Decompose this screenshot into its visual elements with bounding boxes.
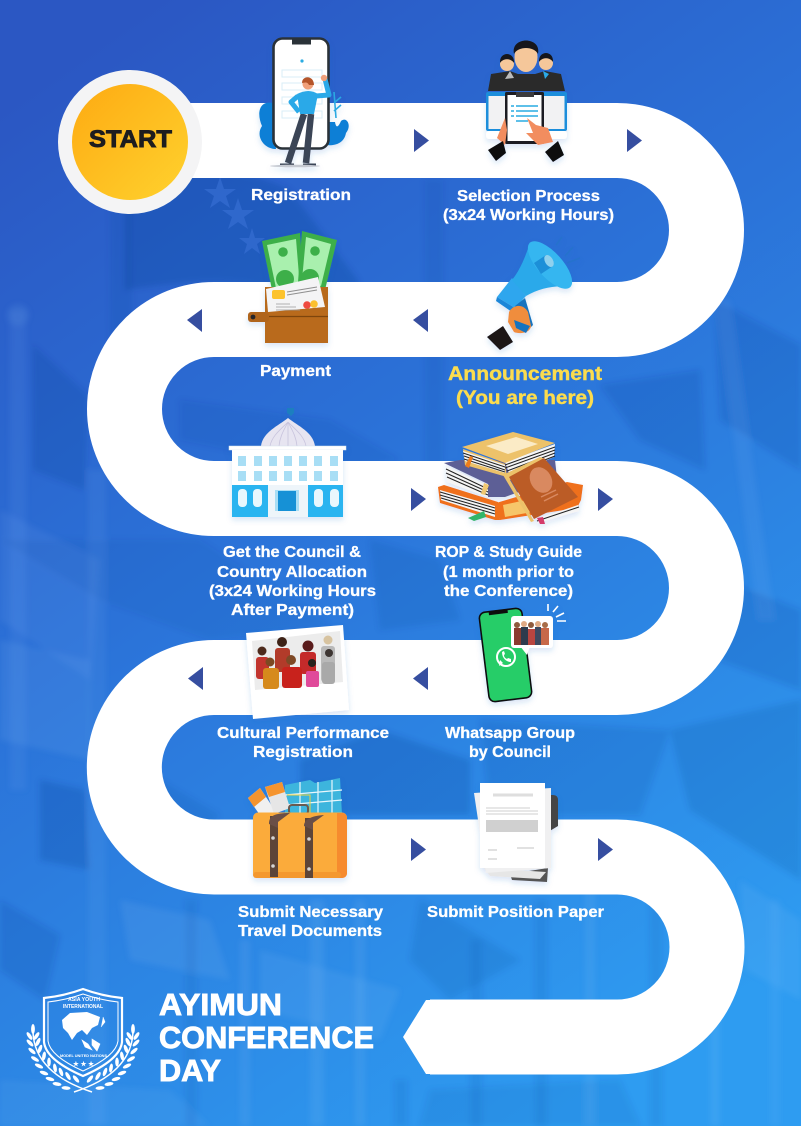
arrows along the road — [187, 129, 642, 861]
label: selection process: Selection Process — [457, 188, 600, 205]
label: get the council and country allocation: After Payment) — [231, 602, 354, 619]
label: whatsapp group by council — [445, 725, 575, 761]
label: registration: Registration — [251, 187, 351, 204]
icon: payment wallet — [248, 231, 337, 343]
heading: AYIMUN conference day: CONFERENCE — [159, 1020, 374, 1055]
label: submit necessary travel documents: Travel Documents — [238, 923, 382, 940]
logo: AYIMUN crest: INTERNATIONAL — [63, 1004, 104, 1010]
logo: AYIMUN crest — [25, 989, 141, 1092]
icon: position paper documents — [474, 783, 558, 882]
icon: whatsapp phone — [479, 604, 566, 702]
label: rop and study guide: ROP & Study Guide — [435, 544, 582, 561]
label: get the council and country allocation: Get the Council & — [223, 544, 361, 561]
heading: AYIMUN conference day: DAY — [159, 1053, 221, 1088]
label: announcement: (You are here) — [456, 387, 594, 409]
label: get the council and country allocation — [209, 544, 376, 619]
label: whatsapp group by council: Whatsapp Group — [445, 725, 575, 742]
label: cultural performance registration: Cultural Performance — [217, 725, 389, 742]
label: rop and study guide: the Conference) — [444, 583, 573, 600]
label: rop and study guide — [435, 544, 582, 600]
start badge: START — [89, 126, 172, 153]
white winding road — [124, 140, 707, 1074]
icon: stack of books — [438, 432, 583, 524]
logo: AYIMUN crest: MODEL UNITED NATIONS — [60, 1053, 107, 1058]
icon: selection panel with clipboard — [486, 40, 567, 162]
start badge — [58, 70, 202, 214]
heading: AYIMUN conference day — [159, 987, 374, 1088]
logo: AYIMUN crest: ★★★ — [73, 1060, 95, 1068]
label: get the council and country allocation: Country Allocation — [217, 564, 367, 581]
label: cultural performance registration — [217, 725, 389, 761]
label: rop and study guide: (1 month prior to — [443, 564, 574, 581]
label: payment: Payment — [260, 363, 332, 380]
label: selection process — [443, 188, 614, 224]
icon: megaphone — [487, 234, 580, 350]
label: announcement: Announcement — [448, 363, 603, 385]
label: cultural performance registration: Registration — [253, 744, 353, 761]
label: submit necessary travel documents — [238, 904, 383, 940]
heading: AYIMUN conference day: AYIMUN — [159, 987, 282, 1022]
icon: cultural polaroid photo — [246, 625, 349, 719]
icon: suitcase with tickets and map — [248, 778, 347, 878]
label: whatsapp group by council: by Council — [469, 744, 551, 761]
label: submit position paper: Submit Position Paper — [427, 904, 604, 921]
label: selection process: (3x24 Working Hours) — [443, 207, 614, 224]
icon: council building — [229, 408, 346, 517]
label: get the council and country allocation: (3x24 Working Hours — [209, 583, 376, 600]
logo: AYIMUN crest: ASIA YOUTH — [68, 997, 100, 1003]
icon: registration phone and person — [259, 38, 349, 167]
label: announcement — [448, 363, 603, 409]
label: submit necessary travel documents: Submit Necessary — [238, 904, 383, 921]
